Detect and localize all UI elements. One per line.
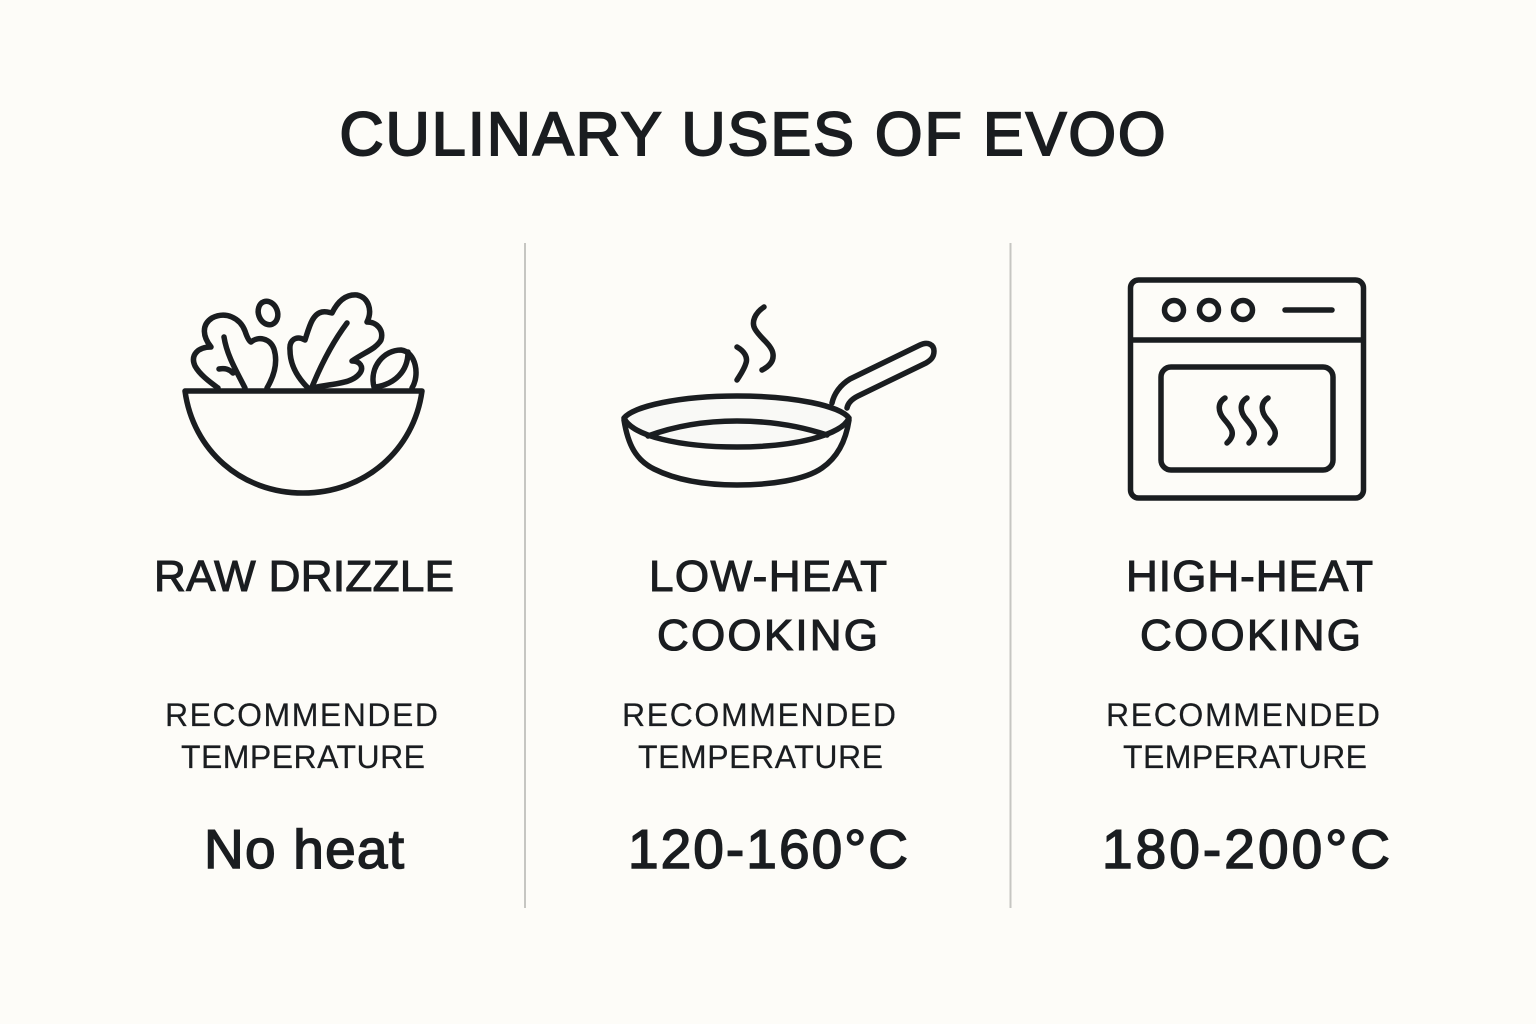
heading: low-heat cooking	[649, 552, 887, 660]
heading: high-heat cooking: COOKING	[1140, 611, 1361, 660]
value: no heat: No heat	[204, 818, 404, 880]
label: recommended temperature	[622, 697, 896, 775]
heading: low-heat cooking: COOKING	[657, 611, 878, 660]
heading: low-heat cooking: LOW-HEAT	[649, 552, 887, 601]
label: recommended temperature: TEMPERATURE	[1123, 739, 1367, 775]
value: 180-200°C: 180-200°C	[1102, 818, 1390, 880]
panel: raw drizzle	[154, 295, 454, 880]
panel: high-heat cooking	[1102, 280, 1390, 880]
heading: high-heat cooking	[1126, 552, 1373, 660]
value: 120-160°C: 120-160°C	[628, 818, 908, 880]
heading: high-heat cooking: HIGH-HEAT	[1126, 552, 1373, 601]
label: recommended temperature	[1106, 697, 1380, 775]
label: recommended temperature: RECOMMENDED	[165, 697, 438, 733]
panel: low-heat cooking	[622, 307, 934, 880]
label: recommended temperature: RECOMMENDED	[622, 697, 896, 733]
icon: frying pan	[624, 307, 934, 485]
title: CULINARY USES OF EVOO	[340, 100, 1166, 168]
label: recommended temperature	[165, 697, 438, 775]
icon: salad bowl	[185, 295, 422, 493]
label: recommended temperature: TEMPERATURE	[181, 739, 425, 775]
heading: raw drizzle: RAW DRIZZLE	[154, 552, 454, 601]
label: recommended temperature: TEMPERATURE	[638, 739, 883, 775]
label: recommended temperature: RECOMMENDED	[1106, 697, 1380, 733]
icon: oven	[1130, 280, 1364, 498]
